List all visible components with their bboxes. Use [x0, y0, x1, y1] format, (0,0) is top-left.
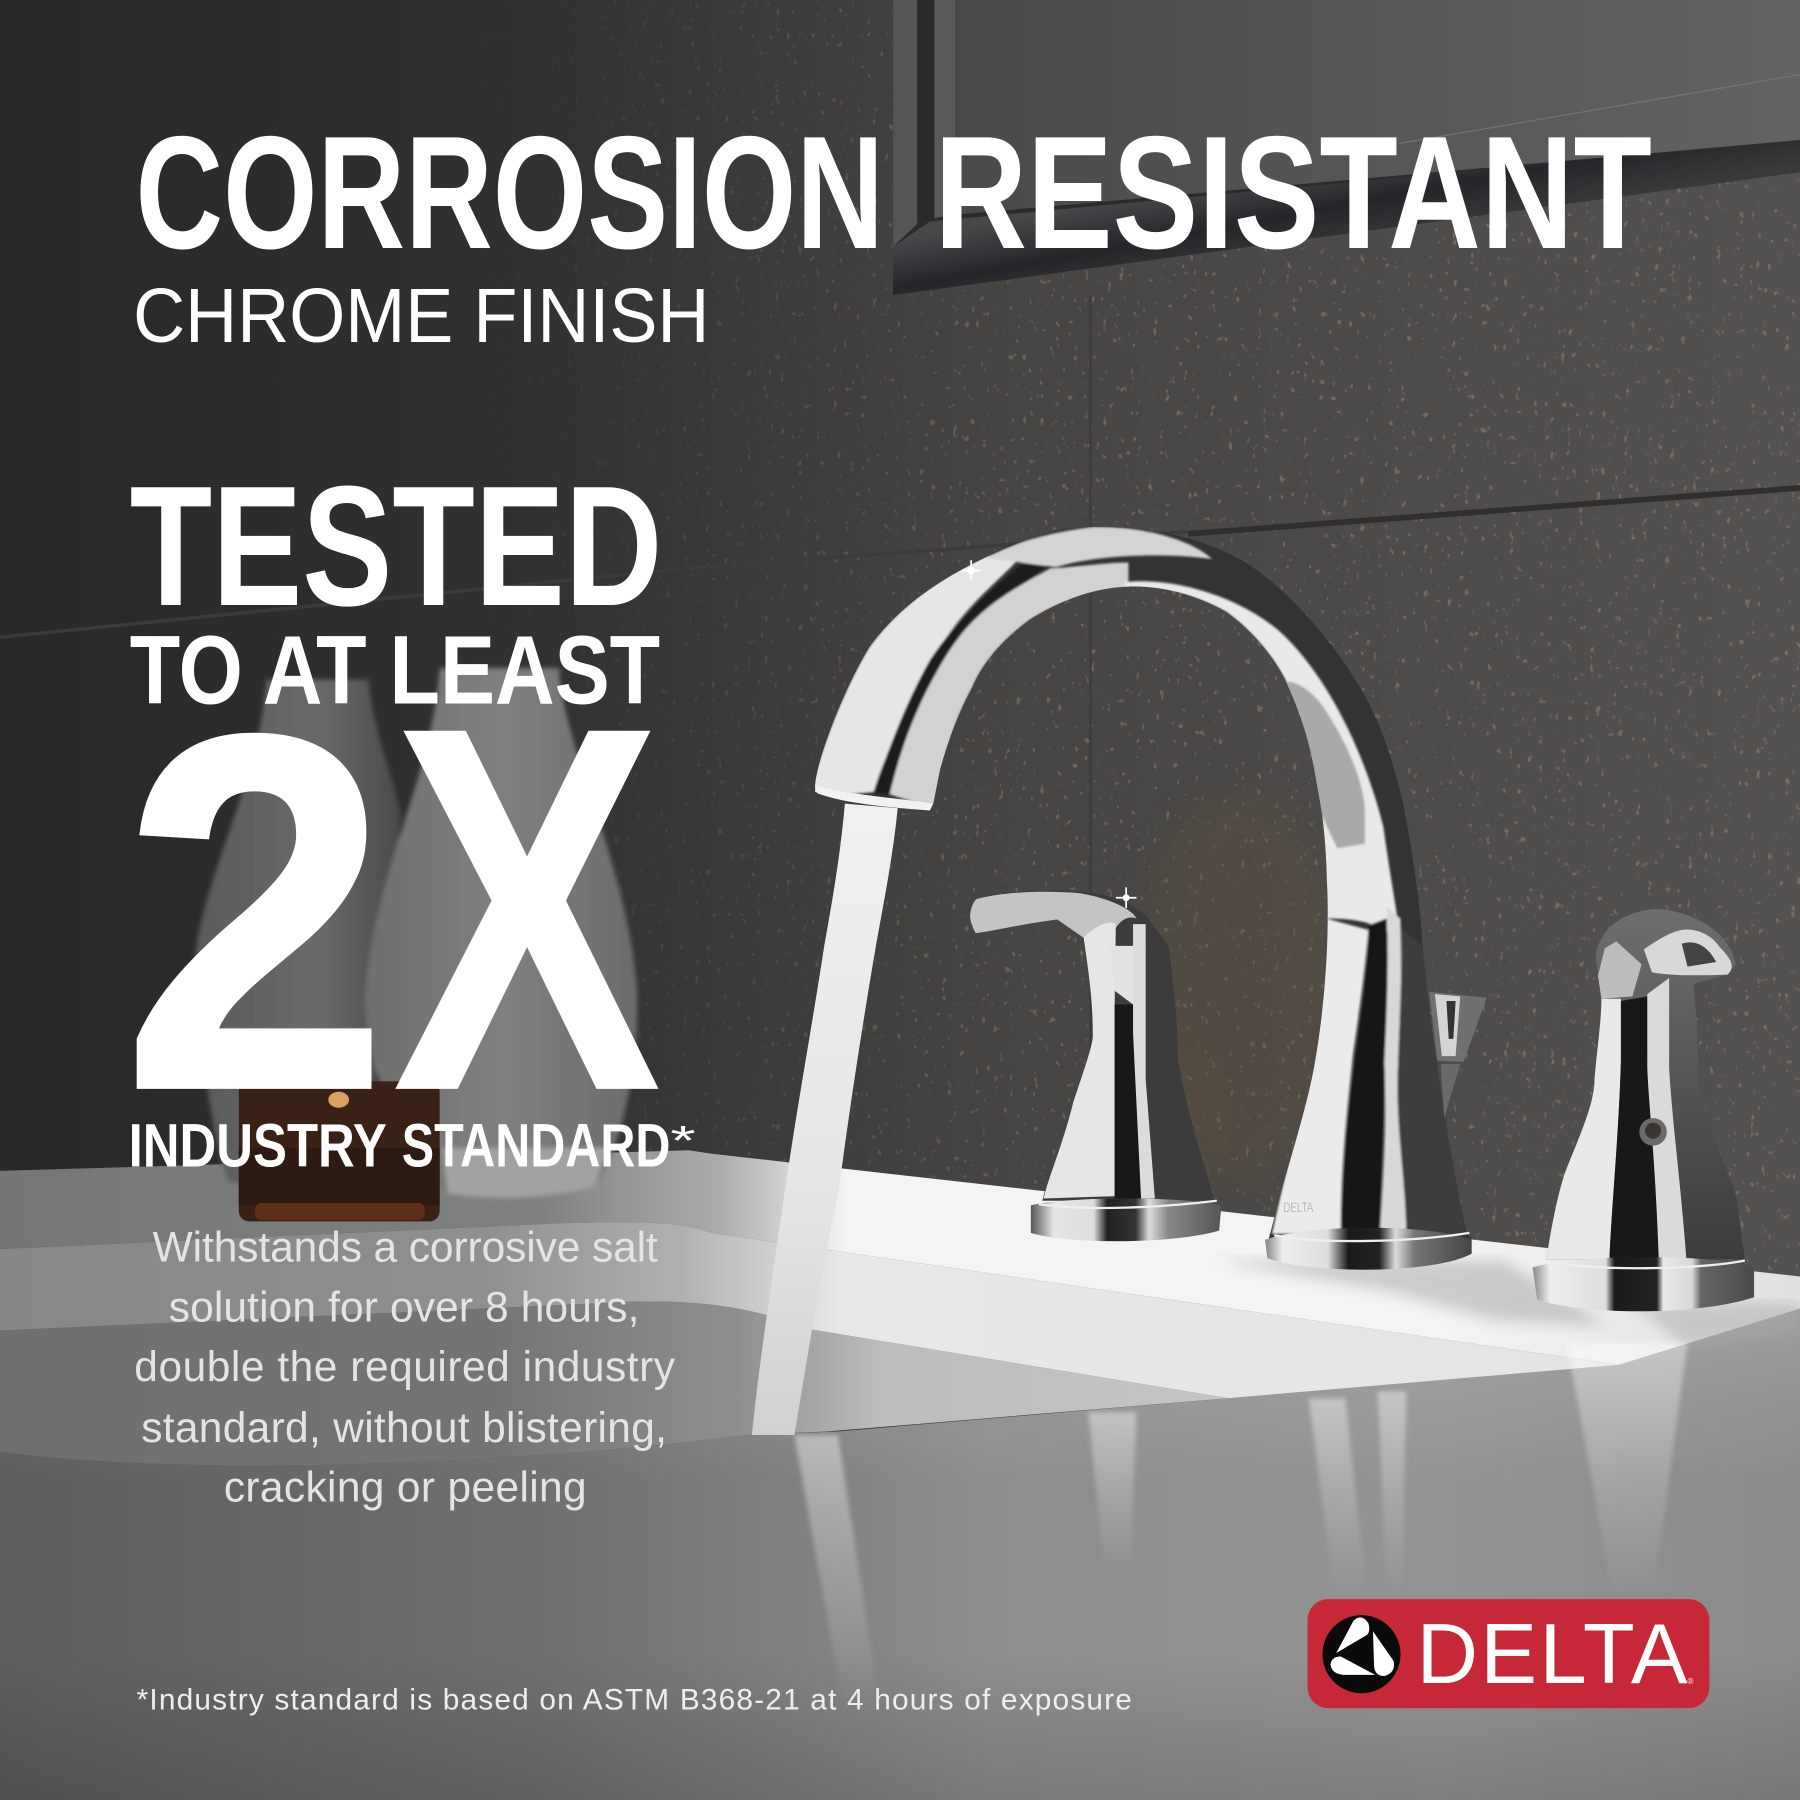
- counter reflections: [794, 1343, 1688, 1710]
- description text block: solution for over 8 hours,: [169, 1283, 639, 1330]
- claim headline: tested to at least 2X: TO AT LEAST: [130, 616, 660, 725]
- subtitle: CHROME FINISH: [133, 273, 709, 359]
- description text block: [134, 1224, 676, 1511]
- left handle: [970, 887, 1221, 1241]
- claim headline: tested to at least 2X: INDUSTRY: [129, 1111, 387, 1179]
- description text block: Withstands a corrosive salt: [153, 1224, 658, 1271]
- claim headline: tested to at least 2X: [122, 451, 696, 1198]
- vases: [195, 668, 637, 1197]
- right handle: [1533, 909, 1754, 1311]
- counter: [0, 1150, 1800, 1800]
- claim headline: tested to at least 2X: STANDARD: [402, 1111, 670, 1179]
- claim headline: tested to at least 2X: TESTED: [130, 451, 662, 642]
- claim headline: tested to at least 2X: *: [670, 1118, 696, 1164]
- logo: Delta: [1308, 1599, 1709, 1708]
- water stream: [752, 804, 898, 1435]
- description text block: double the required industry: [134, 1343, 676, 1390]
- drain stopper knob: [1429, 992, 1487, 1118]
- title: CORROSION: [135, 104, 884, 283]
- background: dark tiled wall: [0, 0, 1800, 1297]
- logo: Delta: ®: [1688, 1677, 1694, 1686]
- faucet spout and body: [809, 527, 1472, 1270]
- description text block: cracking or peeling: [224, 1464, 587, 1511]
- claim headline: tested to at least 2X: 2: [122, 631, 389, 1195]
- mirror: [893, 0, 1800, 295]
- footnote: *Industry standard is based on ASTM B368-21 at 4 hours of exposure: [137, 1683, 1132, 1716]
- candle: [239, 1081, 440, 1221]
- description text block: standard, without blistering,: [141, 1404, 667, 1451]
- claim headline: tested to at least 2X: X: [393, 618, 663, 1198]
- title: [135, 104, 1652, 283]
- faucet spout and body: DELTA: [1283, 1200, 1314, 1215]
- logo: Delta: DELTA: [1417, 1606, 1688, 1701]
